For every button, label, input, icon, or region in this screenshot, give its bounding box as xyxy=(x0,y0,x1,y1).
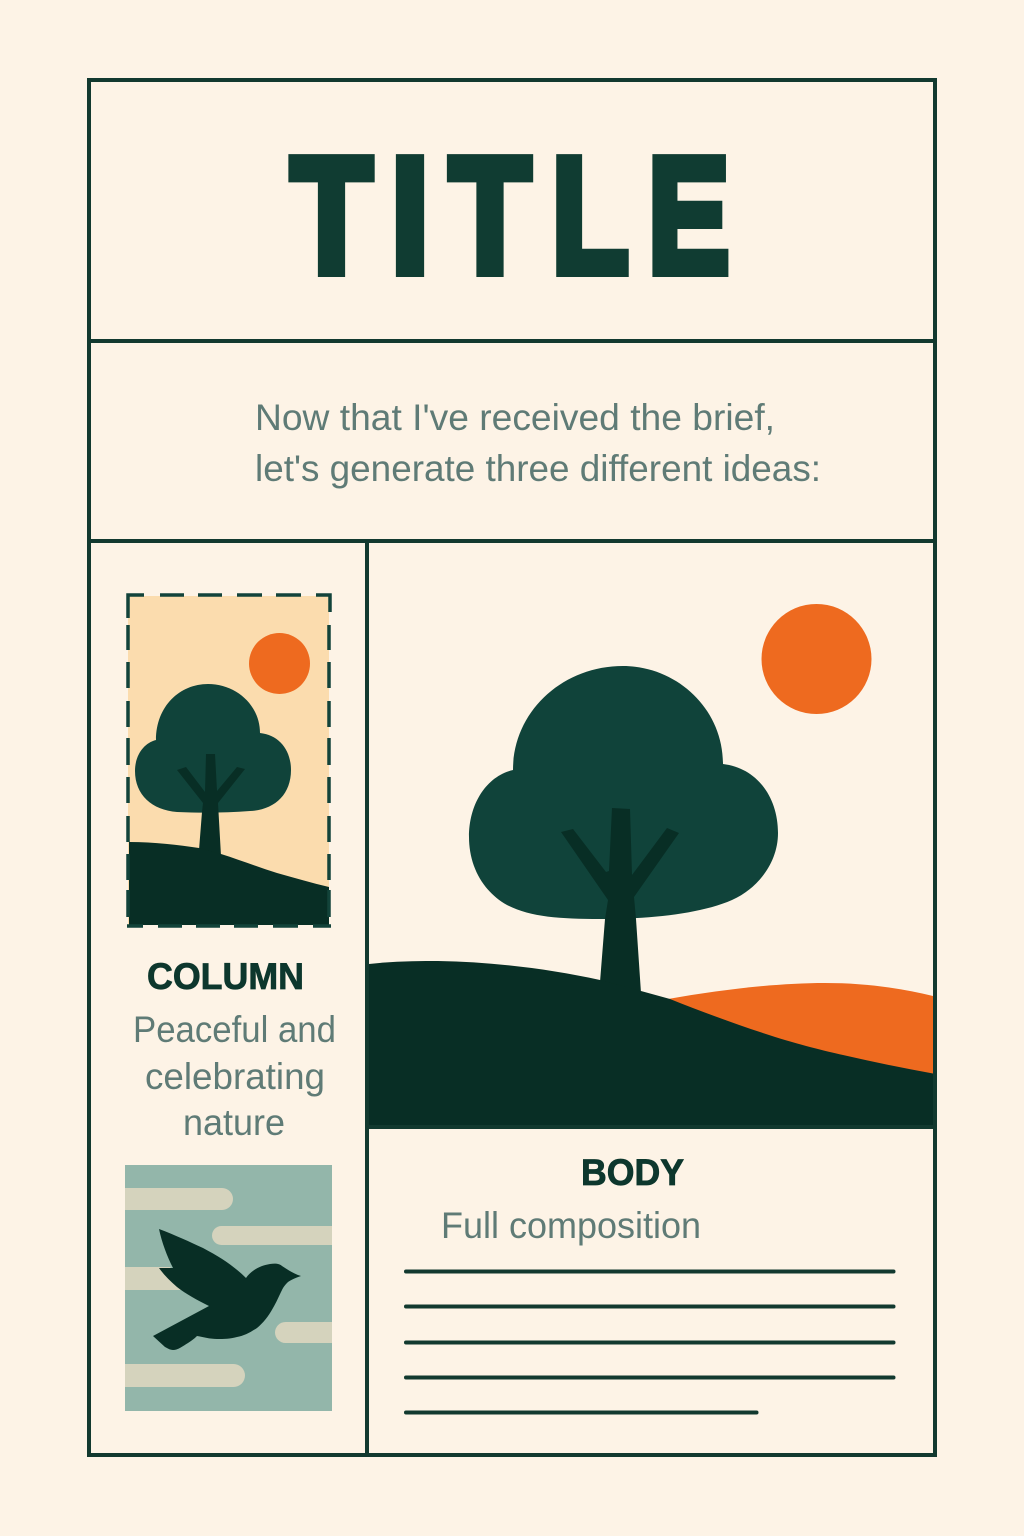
body text placeholder lines xyxy=(406,1272,894,1412)
clouds xyxy=(125,1188,332,1387)
icon: large tree trunk xyxy=(561,808,679,993)
column description xyxy=(133,1009,336,1143)
peach background xyxy=(128,596,329,925)
column description: celebrating xyxy=(145,1056,325,1097)
icon: large sun xyxy=(762,604,872,714)
panel: body illustration, large tree landscape xyxy=(369,604,933,1125)
icon: small sun xyxy=(249,633,310,694)
icon: large tree canopy xyxy=(469,666,778,919)
column description: Peaceful and xyxy=(133,1009,336,1050)
column description: nature xyxy=(183,1102,285,1143)
icon: small tree canopy xyxy=(135,684,291,813)
dashed border xyxy=(127,595,331,926)
large foreground hill xyxy=(369,961,933,1125)
icon: bird xyxy=(153,1229,301,1350)
intro text: Now that I've received the brief, xyxy=(255,397,775,438)
sky background xyxy=(125,1165,332,1411)
intro text xyxy=(255,397,821,489)
panel frame xyxy=(89,80,935,1455)
icon: small tree trunk xyxy=(177,754,245,856)
title: T xyxy=(449,124,531,307)
title xyxy=(291,123,729,308)
orange hill xyxy=(668,983,933,1085)
intro text: let's generate three different ideas: xyxy=(255,448,821,489)
title: T xyxy=(291,124,372,307)
body subheading: Full composition xyxy=(441,1205,701,1246)
title: L xyxy=(552,125,629,308)
body heading: BODY xyxy=(581,1152,684,1193)
title: I xyxy=(391,125,429,308)
title: E xyxy=(648,123,729,307)
small hill xyxy=(129,842,329,925)
panel: bird illustration xyxy=(125,1165,332,1411)
panel: column illustration, tree in dashed frame xyxy=(127,595,331,926)
column heading: COLUMN xyxy=(147,956,304,997)
